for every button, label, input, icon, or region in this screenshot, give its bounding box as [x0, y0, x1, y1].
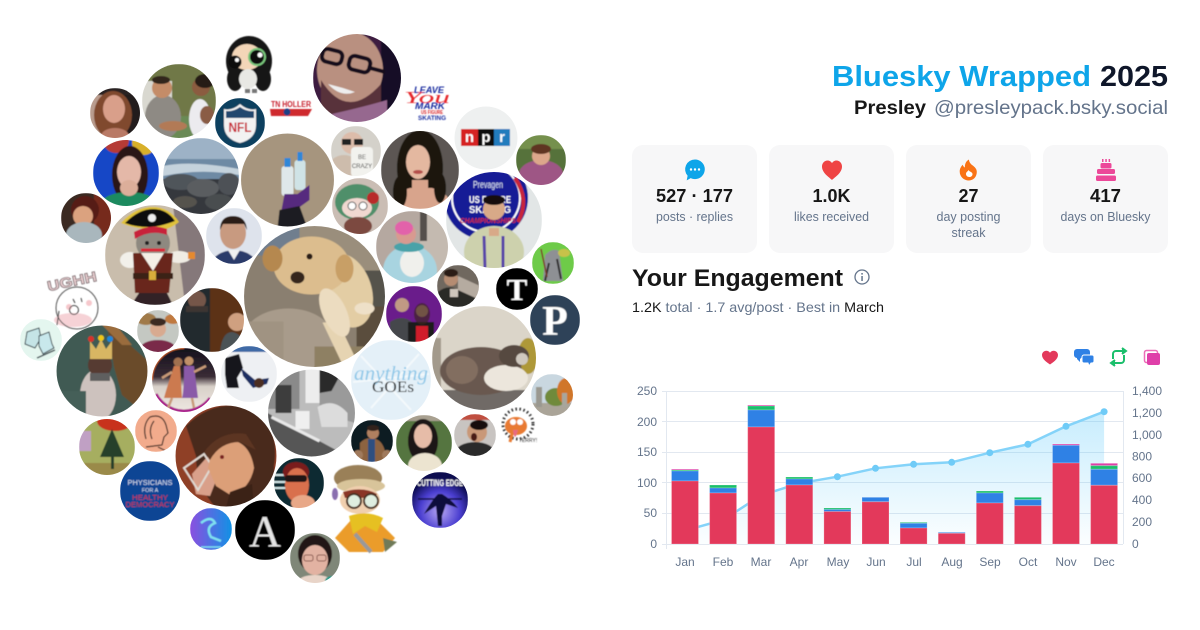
left axis labels: 250	[637, 384, 657, 398]
bar: May	[824, 508, 851, 544]
avatar: NFL logo: NFL	[228, 119, 252, 135]
month labels: Jun	[866, 555, 886, 569]
engagement summary: 1.2K total · 1.7 avg/post · Best in March	[632, 299, 884, 315]
left axis labels: 200	[637, 415, 657, 429]
month labels: Sep	[979, 555, 1001, 569]
avatar: woman among greenery	[396, 415, 452, 471]
left axis labels: 150	[637, 445, 657, 459]
avatar: sleeping Australian shepherd	[432, 306, 538, 412]
right axis labels	[1132, 384, 1162, 551]
avatar: NPR logo: p	[481, 129, 491, 146]
avatar: NPR logo: r	[499, 129, 505, 146]
heading: Your Engagement: Your Engagement	[632, 265, 843, 292]
plot grid	[662, 391, 1124, 549]
avatar: yellow labrador on sofa	[242, 226, 390, 372]
avatar: man at US Figure Skating Championships	[446, 172, 542, 268]
avatar: Politico-style P logo: P	[542, 299, 568, 345]
icon: reposts	[1111, 348, 1126, 366]
stat card: likes received: 1.0K	[812, 186, 850, 206]
icon: replies	[1074, 349, 1094, 366]
left axis labels	[637, 384, 657, 551]
avatar: New York Times logo	[496, 268, 538, 310]
month labels: Oct	[1019, 555, 1038, 569]
stat card: day posting streak: day posting	[936, 209, 1000, 224]
stat card: posts and replies: 527 · 177	[656, 186, 733, 206]
bar: Jan	[672, 469, 698, 544]
stat card: likes received: likes received	[794, 209, 869, 224]
left axis labels: 0	[650, 537, 657, 551]
user name and handle: Presley	[854, 97, 926, 119]
bar: Feb	[710, 485, 737, 544]
avatar: Physicians for a Healthy Democracy logo: DEMOCRACY	[126, 500, 174, 509]
bar: Nov	[1052, 444, 1080, 544]
month labels: Mar	[751, 555, 771, 569]
stat card: day posting streak: streak	[952, 225, 986, 240]
user name and handle: @presleypack.bsky.social	[934, 97, 1168, 119]
cumulative line	[685, 408, 1108, 531]
left axis labels: 50	[644, 506, 657, 520]
avatar: powerpuff cartoon girl	[226, 36, 272, 93]
avatar: Leave Your Mark logo: You	[404, 88, 450, 107]
stat card: posts and replies: posts · replies	[656, 209, 733, 224]
avatar: dog wearing a crown	[56, 325, 148, 421]
month labels: Dec	[1093, 555, 1115, 569]
bar: Apr	[786, 477, 813, 544]
avatar: smiling man with glasses	[313, 32, 403, 124]
avatar: The Cutting Edge poster	[412, 472, 468, 528]
chart legend	[1042, 348, 1160, 366]
icon: speech bubble	[685, 159, 705, 180]
avatar: cartoon cat with spiky fur	[503, 409, 537, 444]
avatar: two men talking	[142, 64, 216, 141]
stat card: days on Bluesky	[1043, 145, 1168, 253]
avatar: man on dark couch	[437, 265, 480, 307]
avatar: pair on purple stage	[386, 286, 442, 342]
left axis labels: 100	[637, 476, 657, 490]
avatar: Politico-style P logo	[530, 295, 580, 345]
avatar: man with mug: BE	[358, 155, 366, 161]
avatar: man yawning	[454, 414, 496, 456]
avatar: Leave Your Mark logo: SKATING	[418, 116, 446, 122]
icon: flame	[960, 160, 977, 181]
avatar: NPR logo	[454, 106, 518, 170]
avatar: gate with autumn trees	[531, 374, 575, 417]
avatar: Leave Your Mark logo: US FIGURE	[421, 110, 444, 116]
avatar: man with mug: CRAZY	[352, 164, 372, 170]
month labels: Apr	[790, 555, 808, 569]
avatar: Physicians for a Healthy Democracy logo	[120, 461, 180, 521]
avatar: man in suit	[206, 208, 262, 264]
avatar: pen sketch on peach	[135, 410, 177, 452]
avatar: toddler	[61, 193, 111, 243]
avatar: woman with red hair	[90, 88, 140, 138]
avatar: Anything Goes logo: GOEs	[372, 379, 414, 396]
stat card: likes received	[769, 145, 894, 253]
avatar: black and white portrait	[268, 369, 356, 459]
title: 2025	[1100, 61, 1168, 93]
bar: Sep	[976, 491, 1003, 544]
avatar: anime girl with green hair	[332, 178, 388, 235]
avatar: Physicians for a Healthy Democracy logo: HEALTHY	[132, 493, 168, 502]
right axis labels: 400	[1132, 493, 1152, 507]
bar: Jun	[862, 497, 889, 544]
right axis labels: 1,000	[1132, 428, 1162, 442]
right axis labels: 200	[1132, 515, 1152, 529]
month labels: Jul	[906, 555, 922, 569]
month labels: Feb	[713, 555, 734, 569]
avatar: grim reaper on green	[532, 242, 574, 284]
bar: Oct	[1014, 497, 1041, 544]
avatar: skater logo on blue purple gradient	[190, 508, 232, 550]
avatar: woman with glasses	[290, 533, 340, 583]
icon: info	[855, 270, 869, 284]
avatar: Physicians for a Healthy Democracy logo: FOR A	[142, 488, 159, 494]
month labels: Jan	[675, 555, 695, 569]
avatar: NPR logo: n	[465, 129, 474, 146]
avatar: A logo on black: A	[249, 507, 281, 556]
avatar: woman in autumn park	[136, 310, 181, 358]
avatar: New York Times logo: T	[507, 272, 528, 307]
avatar: pine tree painting	[79, 419, 135, 475]
avatar: person with pink hair	[376, 211, 448, 283]
stat card: days on Bluesky: 417	[1090, 186, 1121, 206]
avatar: NFL logo	[215, 98, 265, 148]
avatar: rocky shoreline	[163, 138, 240, 215]
icon: heart	[822, 160, 842, 180]
avatar: Leave Your Mark logo	[404, 85, 450, 122]
avatar: UGHH sketch of crying baby	[46, 268, 98, 329]
avatar: man with mug	[331, 126, 381, 176]
avatar: shoes and bottles on carpet	[240, 133, 334, 228]
avatar: Leave Your Mark logo: LEAVE	[414, 85, 445, 96]
avatar: ice dance duo	[152, 348, 216, 412]
avatar: man at US Figure Skating Championships: US FIGURE	[469, 195, 511, 206]
avatar: The Cutting Edge poster: CUTTING EDGE	[417, 478, 463, 488]
icon: birthday cake	[1096, 159, 1116, 181]
bar: Aug	[938, 532, 965, 544]
avatar: Physicians for a Healthy Democracy logo: PHYSICIANS	[128, 478, 172, 487]
bar: Dec	[1091, 463, 1118, 544]
avatar: A logo on black	[235, 500, 295, 560]
avatar: man in brown jacket	[351, 420, 393, 462]
avatar: woman with long dark hair	[381, 130, 459, 209]
avatar: TN Holler logo: TN HOLLER	[271, 100, 311, 109]
avatar: Lucca anime character	[332, 465, 397, 552]
right axis labels: 0	[1132, 537, 1139, 551]
avatar: cartoon cat with spiky fur: TERRY!	[519, 438, 537, 444]
stat card: day posting streak	[906, 145, 1031, 253]
title: Bluesky Wrapped	[832, 61, 1091, 93]
stat card: days on Bluesky: days on Bluesky	[1060, 209, 1151, 224]
bar: Jul	[900, 522, 927, 544]
right axis labels: 800	[1132, 450, 1152, 464]
month labels	[675, 555, 1115, 569]
right axis labels: 1,200	[1132, 406, 1162, 420]
avatar: two men in suits	[180, 288, 248, 352]
month labels: May	[827, 555, 849, 569]
month labels: Aug	[941, 555, 963, 569]
avatar: skater pair on ice	[221, 346, 277, 402]
avatar: child on grass	[516, 135, 566, 188]
avatar: man at US Figure Skating Championships: CHAMPIONSHIPS	[460, 218, 516, 225]
icon: likes	[1042, 351, 1058, 364]
bar: Mar	[748, 405, 775, 544]
icon: quotes	[1144, 350, 1160, 365]
panel: avatar bubble cluster	[20, 32, 580, 589]
right axis labels: 1,400	[1132, 384, 1162, 398]
right axis labels: 600	[1132, 471, 1152, 485]
avatar: UGHH sketch of crying baby: UGHH	[46, 268, 98, 294]
avatar: cat in pirate costume	[105, 205, 205, 305]
stat card: posts and replies	[632, 145, 757, 253]
stat card: day posting streak: 27	[958, 186, 978, 206]
avatar: man at US Figure Skating Championships: SKATING	[469, 205, 511, 216]
avatar: woman with balloons	[93, 140, 159, 206]
month labels: Nov	[1055, 555, 1077, 569]
avatar: anime portrait with brown hair	[175, 405, 277, 508]
avatar: TN Holler logo	[270, 100, 312, 116]
avatar: woman with red sunglasses	[274, 458, 324, 511]
avatar: man at US Figure Skating Championships: Prevagen	[473, 180, 503, 191]
combo chart: monthly engagement	[637, 384, 1162, 569]
cumulative area	[685, 412, 1104, 544]
avatar: Leave Your Mark logo: MARK	[415, 101, 446, 112]
avatar: Anything Goes logo: anything	[354, 363, 428, 385]
stacked bars	[672, 405, 1118, 544]
avatar: Anything Goes logo	[351, 340, 431, 420]
avatar: ice skates sketch	[20, 319, 62, 361]
